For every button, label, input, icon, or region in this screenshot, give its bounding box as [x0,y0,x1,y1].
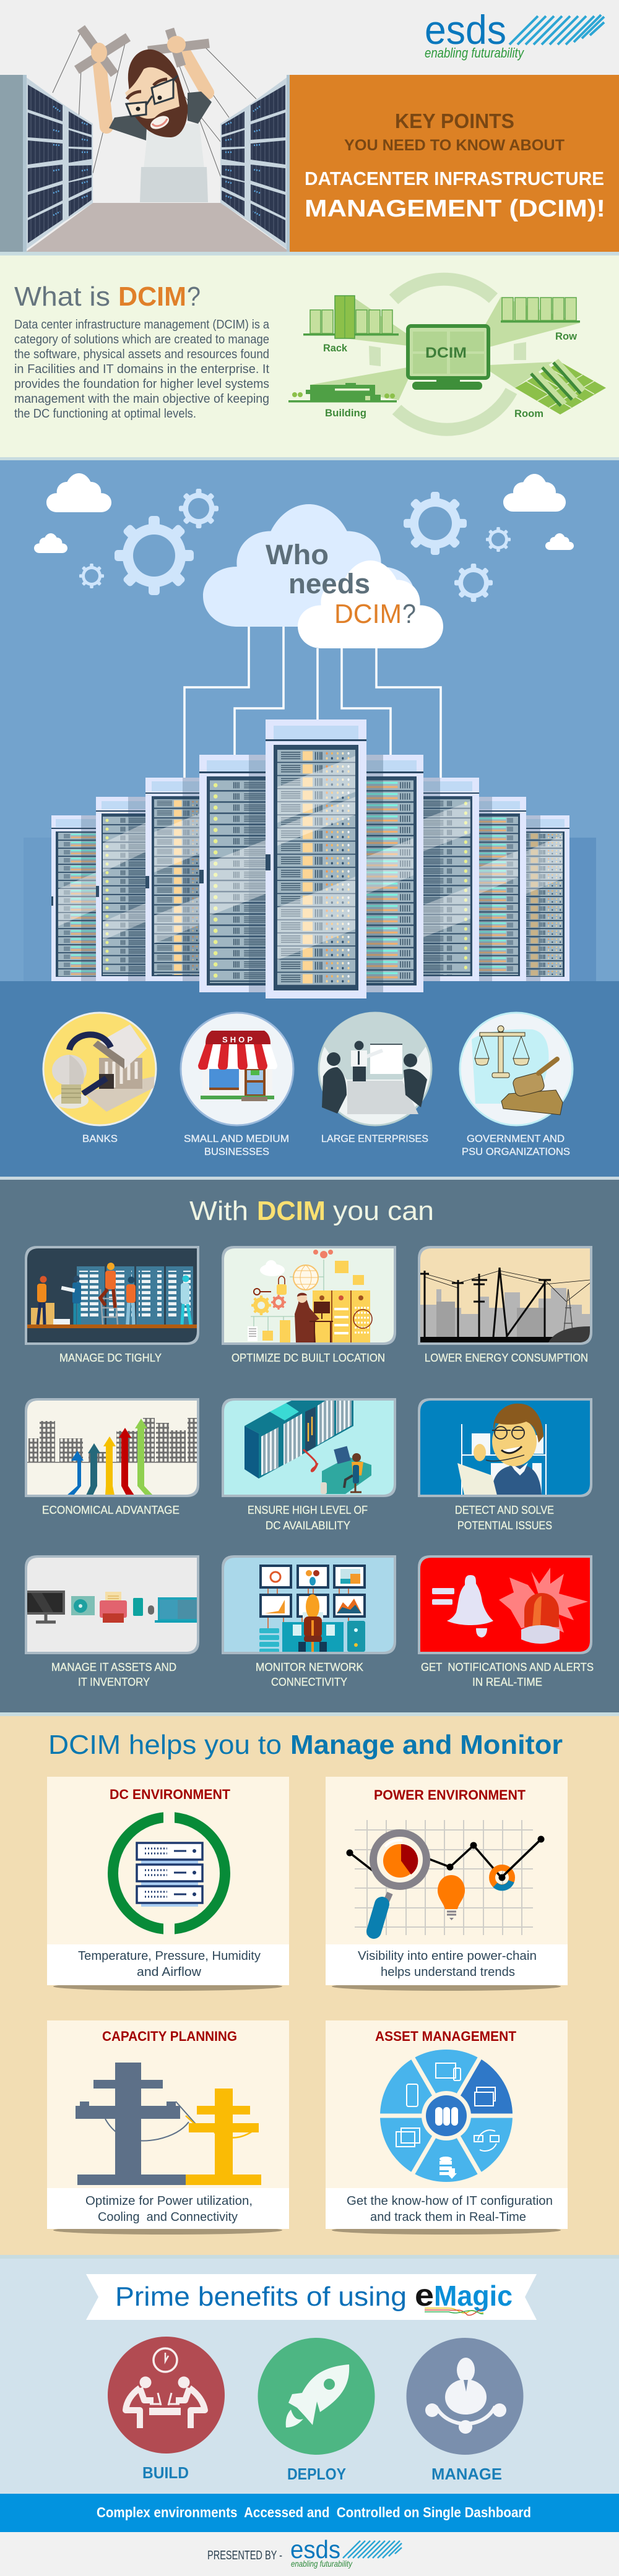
text block: definition: category of solutions which are created to manage [14,332,269,346]
icon group: white clouds [34,473,574,553]
panel: manage and monitor [0,1716,619,2255]
caption row 2: DETECT AND SOLVE [455,1503,554,1516]
footer: PRESENTED BY - [207,2549,282,2562]
benefit: manage [406,2338,524,2483]
text block: definition [14,317,270,421]
card: capacity planning: Cooling and Connectivity [98,2210,238,2224]
caption row 1 [59,1351,588,1364]
card: power environment: Visibility into entire power-chain [358,1949,537,1963]
ribbon heading: Prime benefits of using [115,2282,407,2312]
audience: banks [43,1013,156,1125]
heading cloud: who needs DCIM: Who [266,539,329,570]
card: power environment: helps understand trends [381,1965,515,1979]
heading: what is DCIM: ? [187,281,201,312]
heading: what is DCIM [14,281,201,312]
heading: key points: KEY POINTS [395,109,514,132]
heading cloud: who needs DCIM: DCIM [334,599,402,629]
card: IT assets [25,1555,199,1654]
card: economical advantage [25,1398,199,1497]
panel: title block [290,75,619,252]
heading: With [189,1196,248,1226]
caption row 2 [42,1503,554,1532]
monitor [408,326,488,390]
card: detect and solve [418,1398,592,1497]
text block: definition: the DC functioning at optimal levels. [14,406,196,421]
icon: building: Building [325,407,366,419]
card: DC environment: Temperature, Pressure, Humidity [78,1949,261,1963]
illustration: puppet man in server aisle [0,28,290,252]
panel: who needs DCIM [0,460,619,1177]
card: capacity planning [47,2020,289,2235]
ribbon heading: Magic [434,2280,513,2312]
caption row 2: ENSURE HIGH LEVEL OF [248,1503,368,1516]
logo: esds: enabling futurability [425,45,525,61]
caption row 3: GET NOTIFICATIONS AND ALERTS [421,1660,594,1673]
logo: esds [425,7,604,61]
card: power environment [326,1777,568,1991]
heading cloud: who needs DCIM [203,504,443,648]
card: availability [222,1398,396,1497]
label: BUILD [142,2463,189,2482]
card: DC environment: DC ENVIRONMENT [110,1787,231,1802]
server racks [51,719,569,998]
audience labels: BANKS [82,1133,118,1144]
icon: power poles [76,2063,261,2185]
caption row 3: MANAGE IT ASSETS AND [51,1660,176,1673]
rack F [366,755,423,992]
rack H [479,797,526,981]
logo: esds: esds [425,7,506,53]
card: capacity planning: CAPACITY PLANNING [102,2029,237,2044]
card: capacity planning: Optimize for Power utilization, [85,2194,253,2208]
benefit: deploy [258,2338,375,2483]
banner: single dashboard: Complex environments Accessed and Controlled on Single Dashboard [97,2504,531,2520]
caption row 3: IT INVENTORY [78,1675,150,1688]
heading cloud: who needs DCIM: needs [288,568,370,599]
icon: building [288,383,397,419]
card: DC environment: and Airflow [137,1965,202,1979]
panel: prime benefits of eMagic [0,2259,619,2494]
card: asset management: Get the know-how of IT configuration [347,2194,553,2208]
monitor: DCIM [425,345,467,361]
text block: definition: the software, physical assets and resources found [14,347,269,361]
audience labels: LARGE ENTERPRISES [321,1133,428,1144]
rack B [96,797,145,981]
caption row 3: CONNECTIVITY [271,1675,347,1688]
logo: esds small: enabling futurability [291,2559,353,2569]
rack A [51,815,96,981]
rack I [526,815,569,981]
icon: row [501,298,580,342]
icon: asset wheel [378,2050,515,2182]
heading: Manage and Monitor [290,1730,563,1760]
audience labels [82,1133,570,1157]
diagram: DCIM scope [288,279,606,429]
audience labels: PSU ORGANIZATIONS [462,1146,570,1157]
audience labels: SMALL AND MEDIUM [184,1133,289,1144]
icon: row: Row [555,330,578,342]
card: asset management [326,2020,568,2235]
connector lines [184,627,441,779]
heading cloud: who needs DCIM: ? [402,599,416,629]
card: manage DC tightly [25,1246,199,1345]
icon: rack: Rack [323,342,348,354]
caption row 2: DC AVAILABILITY [266,1519,350,1532]
panel: with DCIM you can [0,1180,619,1712]
text block: definition: Data center infrastructure management (DCIM) is a [14,317,270,332]
chart: line trend with magnifier [347,1820,545,1935]
ribbon heading [86,2274,537,2320]
ribbon heading: e [415,2278,434,2312]
heading: what is DCIM: What is [14,281,110,312]
audience labels: GOVERNMENT AND [467,1133,565,1144]
audience: large enterprises [319,1012,431,1125]
card: lower energy [418,1246,592,1345]
panel: header [0,0,619,252]
caption row 3 [51,1660,594,1688]
audience: small and medium businesses: SHOP [222,1035,253,1044]
icon: room [514,359,606,419]
logo: esds small [290,2535,402,2569]
icon: server ring [113,1810,225,1937]
text block: definition: in Facilities and IT domains in the enterprise. It [14,362,269,376]
caption row 2: ECONOMICAL ADVANTAGE [42,1503,180,1516]
card: notifications [418,1555,592,1654]
caption row 3: IN REAL-TIME [472,1675,542,1688]
heading [189,1196,434,1226]
text block: definition: provides the foundation for higher level systems [14,377,269,391]
icon: room: Room [514,408,543,419]
audience: small and medium businesses [181,1013,293,1125]
title line 2: MANAGEMENT (DCIM)! [305,195,605,222]
caption row 1: MANAGE DC TIGHLY [59,1351,162,1364]
heading [48,1730,563,1760]
rack E center [266,719,366,998]
label: MANAGE [431,2465,502,2483]
rack G [423,778,479,981]
heading: what is DCIM: DCIM [118,281,186,312]
card: asset management: ASSET MANAGEMENT [375,2029,517,2044]
footer [0,2532,619,2576]
label: DEPLOY [287,2465,346,2483]
caption row 1: OPTIMIZE DC BUILT LOCATION [232,1351,385,1364]
card: monitor network [222,1555,396,1654]
card: optimize location [222,1246,396,1345]
subheading: YOU NEED TO KNOW ABOUT [344,137,565,154]
icon: rack [303,296,399,354]
card: DC environment [47,1777,289,1991]
banner: single dashboard [0,2494,619,2532]
icon group: gears [79,489,511,602]
benefit: build [108,2337,225,2482]
title line 1: DATACENTER INFRASTRUCTURE [305,168,604,189]
heading: DCIM [257,1196,326,1226]
caption row 3: MONITOR NETWORK [256,1660,364,1673]
card: power environment: POWER ENVIRONMENT [374,1787,526,1803]
caption row 2: POTENTIAL ISSUES [457,1519,552,1532]
audience: government and PSU [460,1013,573,1125]
caption row 1: LOWER ENERGY CONSUMPTION [425,1351,588,1364]
audience labels: BUSINESSES [204,1146,269,1157]
rack D [199,755,266,992]
heading: DCIM helps you to [48,1730,282,1760]
text block: definition: management with the main objective of keeping [14,392,269,406]
logo: esds small: esds [290,2535,340,2564]
panel: what is DCIM [0,255,619,457]
card: asset management: and track them in Real-Time [370,2210,526,2224]
rack C [145,778,199,981]
heading: you can [333,1196,434,1226]
